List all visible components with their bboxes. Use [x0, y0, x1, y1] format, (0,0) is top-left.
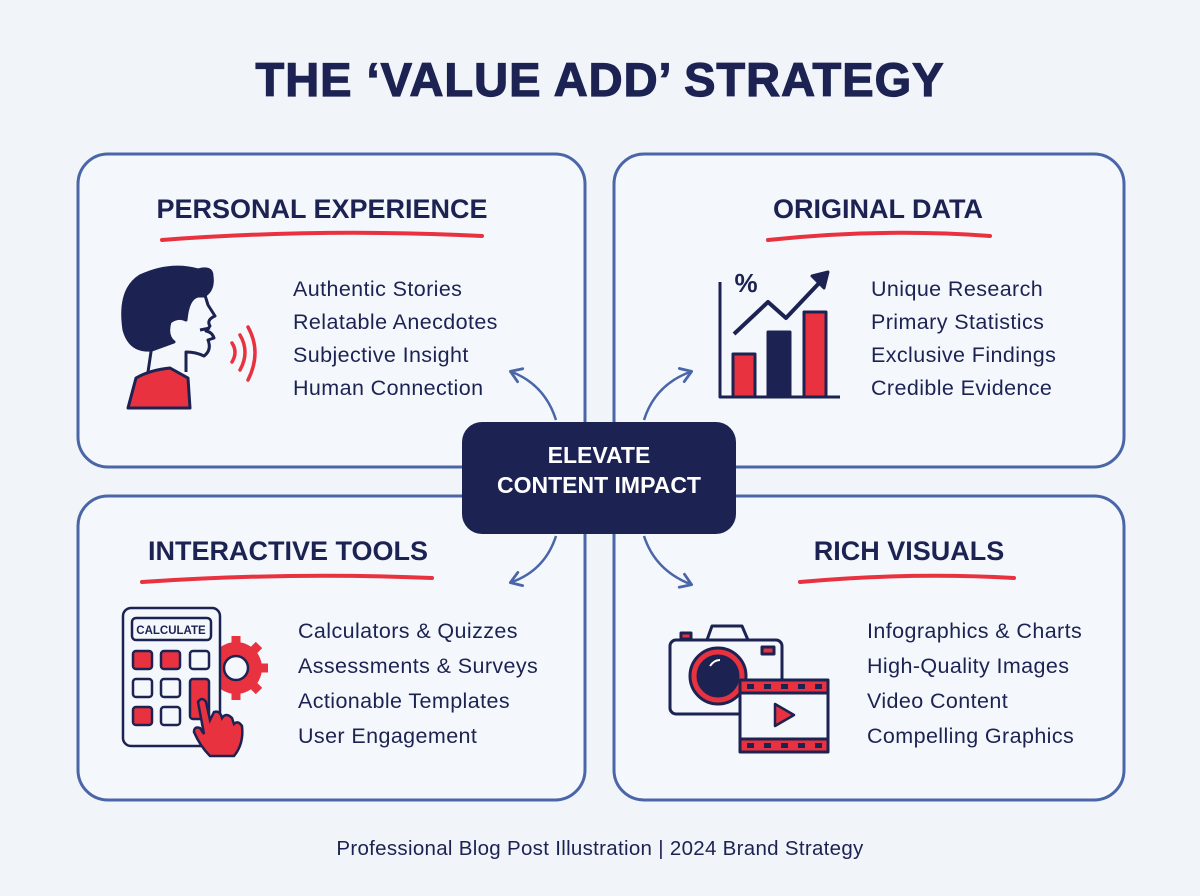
text block: original data list: Exclusive Findings — [871, 343, 1056, 367]
text block: original data list: Unique Research — [871, 277, 1043, 301]
icon: calculator — [123, 608, 268, 756]
text block: rich visuals list: Infographics & Charts — [867, 619, 1082, 643]
text block: rich visuals list: Video Content — [867, 689, 1008, 713]
text block: original data list: Primary Statistics — [871, 310, 1044, 334]
center box — [462, 422, 736, 534]
title: THE ‘VALUE ADD’ STRATEGY — [256, 53, 944, 106]
arrows: center to panels — [512, 372, 690, 584]
icon: speaking person — [123, 267, 215, 408]
icon: bar chart — [720, 268, 840, 397]
footer: Professional Blog Post Illustration | 2024 Brand Strategy — [336, 837, 864, 860]
icon: camera and film — [670, 626, 828, 752]
text block: personal experience list: Authentic Stories — [293, 277, 462, 301]
icon: calculator: CALCULATE — [136, 625, 206, 637]
text block: interactive tools list — [298, 619, 538, 748]
text block: original data list: Credible Evidence — [871, 376, 1052, 400]
text block: personal experience list: Relatable Anecdotes — [293, 310, 498, 334]
text block: personal experience list — [293, 277, 498, 400]
text block: interactive tools list: Assessments & Surveys — [298, 654, 538, 678]
text block: rich visuals list: Compelling Graphics — [867, 724, 1074, 748]
heading: original data: ORIGINAL DATA — [773, 194, 983, 224]
text block: original data list — [871, 277, 1056, 400]
panel: original data — [614, 154, 1124, 467]
heading: interactive tools: INTERACTIVE TOOLS — [148, 536, 428, 566]
text block: rich visuals list — [867, 619, 1082, 748]
text block: interactive tools list: Actionable Templates — [298, 689, 510, 713]
panel: interactive tools — [78, 496, 585, 800]
icon: sound waves — [232, 327, 255, 380]
heading: personal experience: PERSONAL EXPERIENCE — [156, 194, 488, 224]
text block: interactive tools list: User Engagement — [298, 724, 477, 748]
panel: personal experience — [78, 154, 585, 467]
panel: rich visuals — [614, 496, 1124, 800]
icon: bar chart: % — [734, 268, 758, 298]
center box: ELEVATE — [548, 442, 650, 468]
text block: personal experience list: Subjective Insight — [293, 343, 469, 367]
text block: personal experience list: Human Connection — [293, 376, 483, 400]
text block: rich visuals list: High-Quality Images — [867, 654, 1069, 678]
heading: rich visuals: RICH VISUALS — [814, 536, 1004, 566]
text block: interactive tools list: Calculators & Quizzes — [298, 619, 518, 643]
center box: CONTENT IMPACT — [497, 472, 701, 498]
